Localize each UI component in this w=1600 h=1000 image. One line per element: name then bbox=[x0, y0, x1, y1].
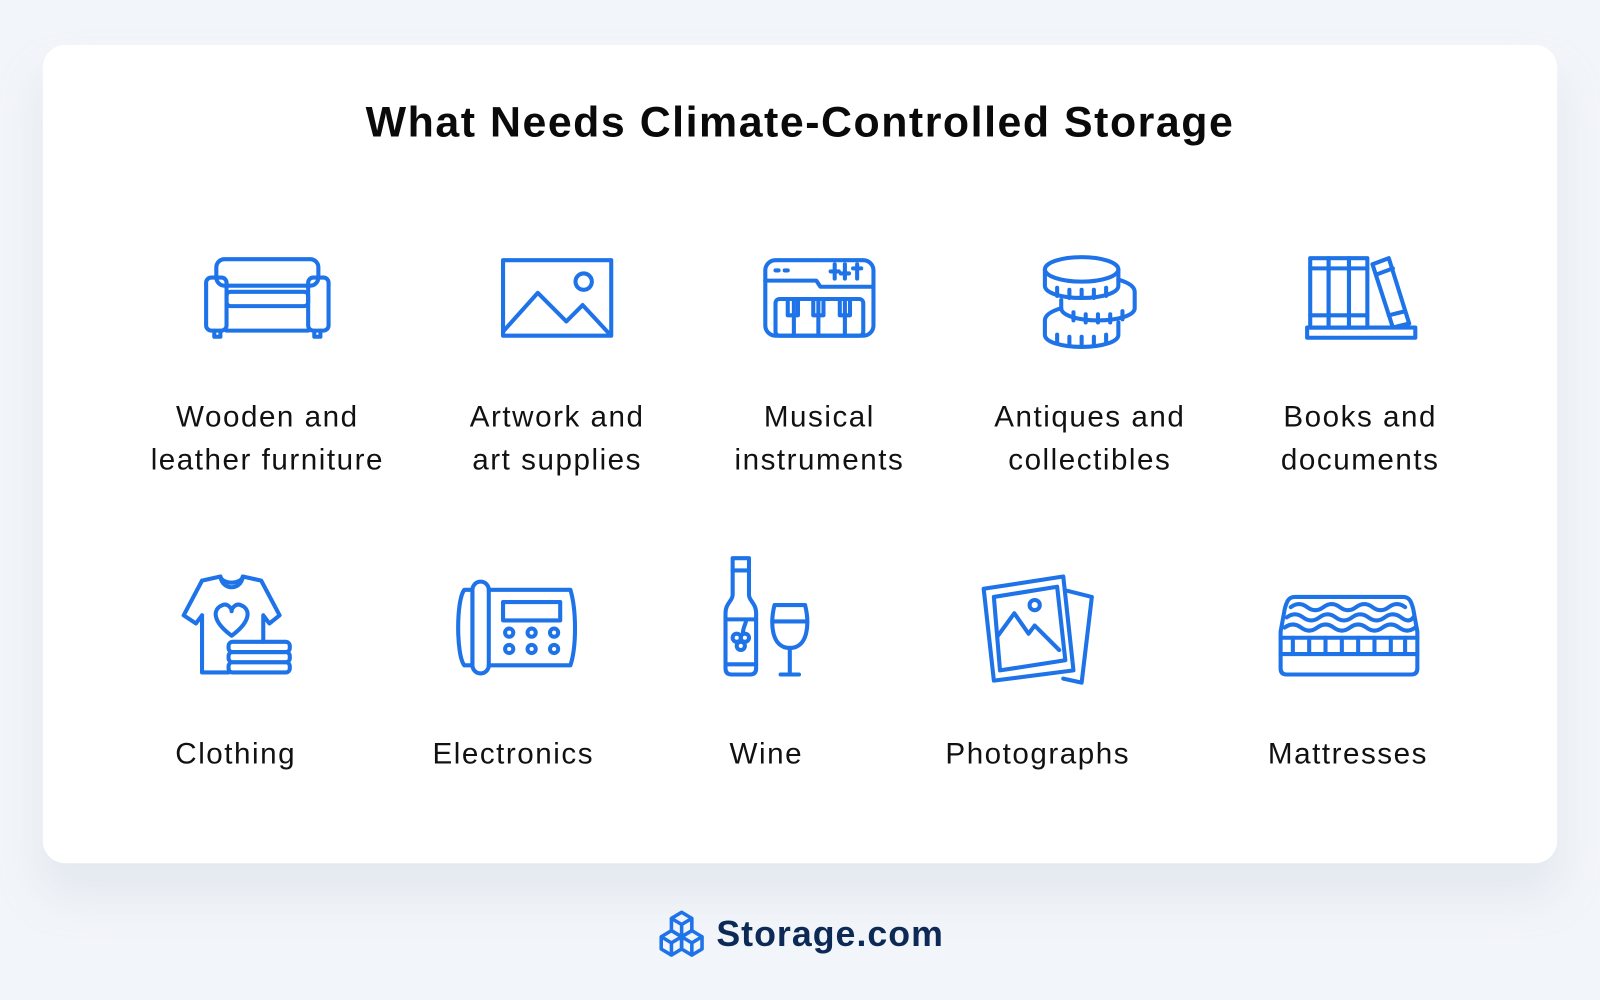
label: artwork bbox=[470, 401, 644, 477]
logo text: Storage.com bbox=[716, 914, 944, 954]
logo bbox=[659, 910, 944, 957]
label: musical bbox=[734, 401, 904, 477]
label: photographs: Photographs bbox=[945, 738, 1130, 770]
icon: photographs bbox=[982, 574, 1094, 685]
title: What Needs Climate-Controlled Storage bbox=[366, 98, 1234, 146]
label: artwork: art supplies bbox=[472, 444, 642, 477]
icon: wine bbox=[723, 556, 810, 676]
label: wine: Wine bbox=[730, 738, 803, 770]
label: musical: Musical bbox=[764, 401, 875, 434]
icon: keyboard bbox=[763, 258, 876, 338]
card bbox=[43, 45, 1557, 863]
icon: mattress bbox=[1278, 594, 1420, 676]
label: books bbox=[1281, 401, 1439, 477]
label: books: documents bbox=[1281, 444, 1439, 477]
icon: coins bbox=[1042, 255, 1137, 349]
label: clothing: Clothing bbox=[175, 738, 296, 770]
label: artwork: Artwork and bbox=[470, 401, 644, 434]
label: antiques: Antiques and bbox=[994, 401, 1185, 434]
label: furniture: Wooden and bbox=[176, 401, 359, 434]
icon: books bbox=[1305, 256, 1418, 340]
icon: cubes bbox=[659, 910, 704, 957]
label: furniture: leather furniture bbox=[151, 444, 384, 477]
label: mattresses: Mattresses bbox=[1268, 738, 1428, 770]
label: musical: instruments bbox=[734, 444, 904, 477]
label: electronics: Electronics bbox=[432, 738, 594, 770]
label: furniture bbox=[151, 401, 384, 477]
icon: sofa bbox=[204, 257, 331, 339]
icon: phone bbox=[456, 580, 578, 676]
label: antiques bbox=[994, 401, 1185, 477]
icon: artwork bbox=[500, 258, 614, 338]
label: books: Books and bbox=[1283, 401, 1437, 434]
icon: clothing bbox=[182, 574, 292, 674]
label: antiques: collectibles bbox=[1008, 444, 1171, 477]
